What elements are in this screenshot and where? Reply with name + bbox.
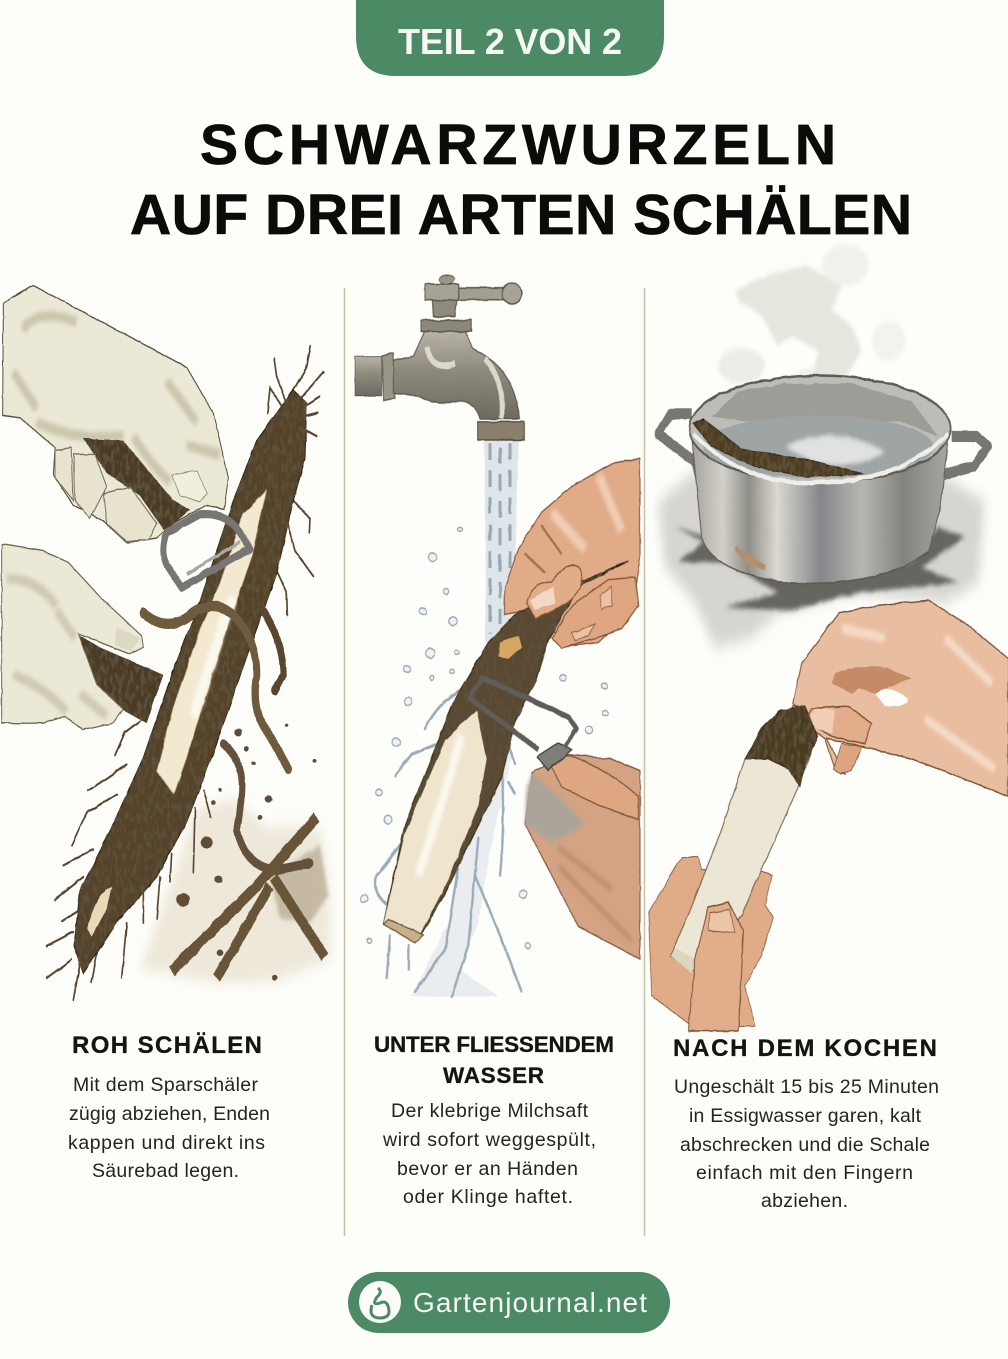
panel text: unter fliessendem wasser xyxy=(374,1032,614,1208)
panel text: roh schälen: kappen und direkt ins xyxy=(68,1132,265,1154)
glove: lower hand xyxy=(2,544,143,730)
panel text: unter fliessendem wasser: wird sofort weggespült, xyxy=(382,1129,596,1151)
panel text: nach dem kochen: Ungeschält 15 bis 25 Minuten xyxy=(674,1076,939,1098)
lower hand back xyxy=(648,857,773,1026)
panel text: roh schälen: Säurebad legen. xyxy=(92,1160,239,1182)
footer brand pill xyxy=(348,1272,670,1333)
badge: part indicator xyxy=(356,0,664,76)
water drops xyxy=(360,527,608,949)
title: SCHWARZWURZELN xyxy=(200,113,836,177)
panel text: roh schälen xyxy=(68,1032,270,1182)
pot rim and inside xyxy=(689,376,951,483)
panel text: nach dem kochen xyxy=(673,1035,939,1212)
root being peeled xyxy=(383,561,638,943)
pot body xyxy=(692,421,950,583)
panel text: roh schälen: ROH SCHÄLEN xyxy=(72,1032,262,1059)
panel text: nach dem kochen: einfach mit den Fingern xyxy=(696,1162,913,1184)
peel strips on ground xyxy=(172,817,325,978)
panel text: unter fliessendem wasser: oder Klinge haftet. xyxy=(403,1186,573,1208)
soil crumbs xyxy=(177,724,316,981)
badge: part indicator: TEIL 2 VON 2 xyxy=(398,21,622,62)
peeled strip xyxy=(157,490,267,794)
icon: plant logo xyxy=(359,1281,401,1323)
footer brand pill: Gartenjournal.net xyxy=(413,1287,647,1318)
title: AUF DREI ARTEN SCHÄLEN xyxy=(130,183,912,247)
title xyxy=(130,113,912,247)
panel text: unter fliessendem wasser: bevor er an Händen xyxy=(397,1158,578,1180)
panel text: nach dem kochen: in Essigwasser garen, kalt xyxy=(689,1105,922,1127)
main root xyxy=(74,390,307,973)
thin roots xyxy=(47,347,323,1000)
panel text: unter fliessendem wasser: UNTER FLIESSENDEM xyxy=(374,1032,614,1057)
panel text: nach dem kochen: abziehen. xyxy=(761,1190,848,1212)
curled peel xyxy=(143,606,310,870)
water stream xyxy=(376,440,522,996)
glove: upper hand xyxy=(3,286,228,543)
steam xyxy=(718,245,905,414)
peeler xyxy=(163,514,250,588)
panel: after cooking illustration xyxy=(648,245,1008,1031)
panel text: unter fliessendem wasser: WASSER xyxy=(443,1063,544,1088)
panel text: unter fliessendem wasser: Der klebrige Milchsaft xyxy=(391,1100,589,1122)
panel text: roh schälen: zügig abziehen, Enden xyxy=(69,1103,270,1125)
soil patch xyxy=(140,799,330,983)
panel text: nach dem kochen: NACH DEM KOCHEN xyxy=(673,1035,937,1062)
root in pot xyxy=(693,419,863,477)
pot handles xyxy=(658,414,988,497)
faucet xyxy=(355,275,524,440)
peeler handle xyxy=(83,438,190,532)
thumb xyxy=(688,902,743,1031)
lower hand with peeler xyxy=(468,677,640,959)
stove and shadow xyxy=(658,472,985,648)
panel text: roh schälen: Mit dem Sparschäler xyxy=(73,1074,258,1096)
upper hand xyxy=(504,459,640,647)
hand peeling xyxy=(793,600,1008,797)
column dividers xyxy=(344,288,644,1236)
panel text: nach dem kochen: abschrecken und die Schale xyxy=(680,1134,930,1156)
panel: under running water illustration xyxy=(355,275,640,996)
peeled root xyxy=(670,706,818,973)
panel: raw peeling illustration xyxy=(2,286,330,1000)
second root held in lower hand xyxy=(65,627,163,723)
